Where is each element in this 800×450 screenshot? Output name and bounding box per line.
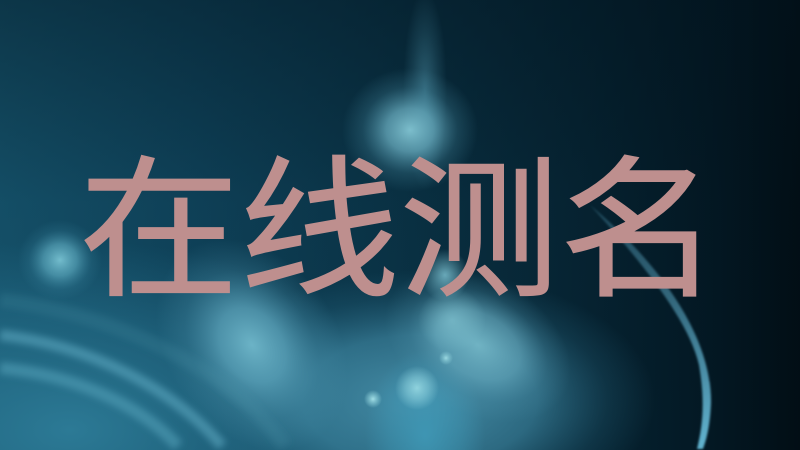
title: 在线测名 (79, 147, 720, 317)
light arc: right (590, 205, 711, 449)
light arcs: lower left (0, 300, 285, 446)
